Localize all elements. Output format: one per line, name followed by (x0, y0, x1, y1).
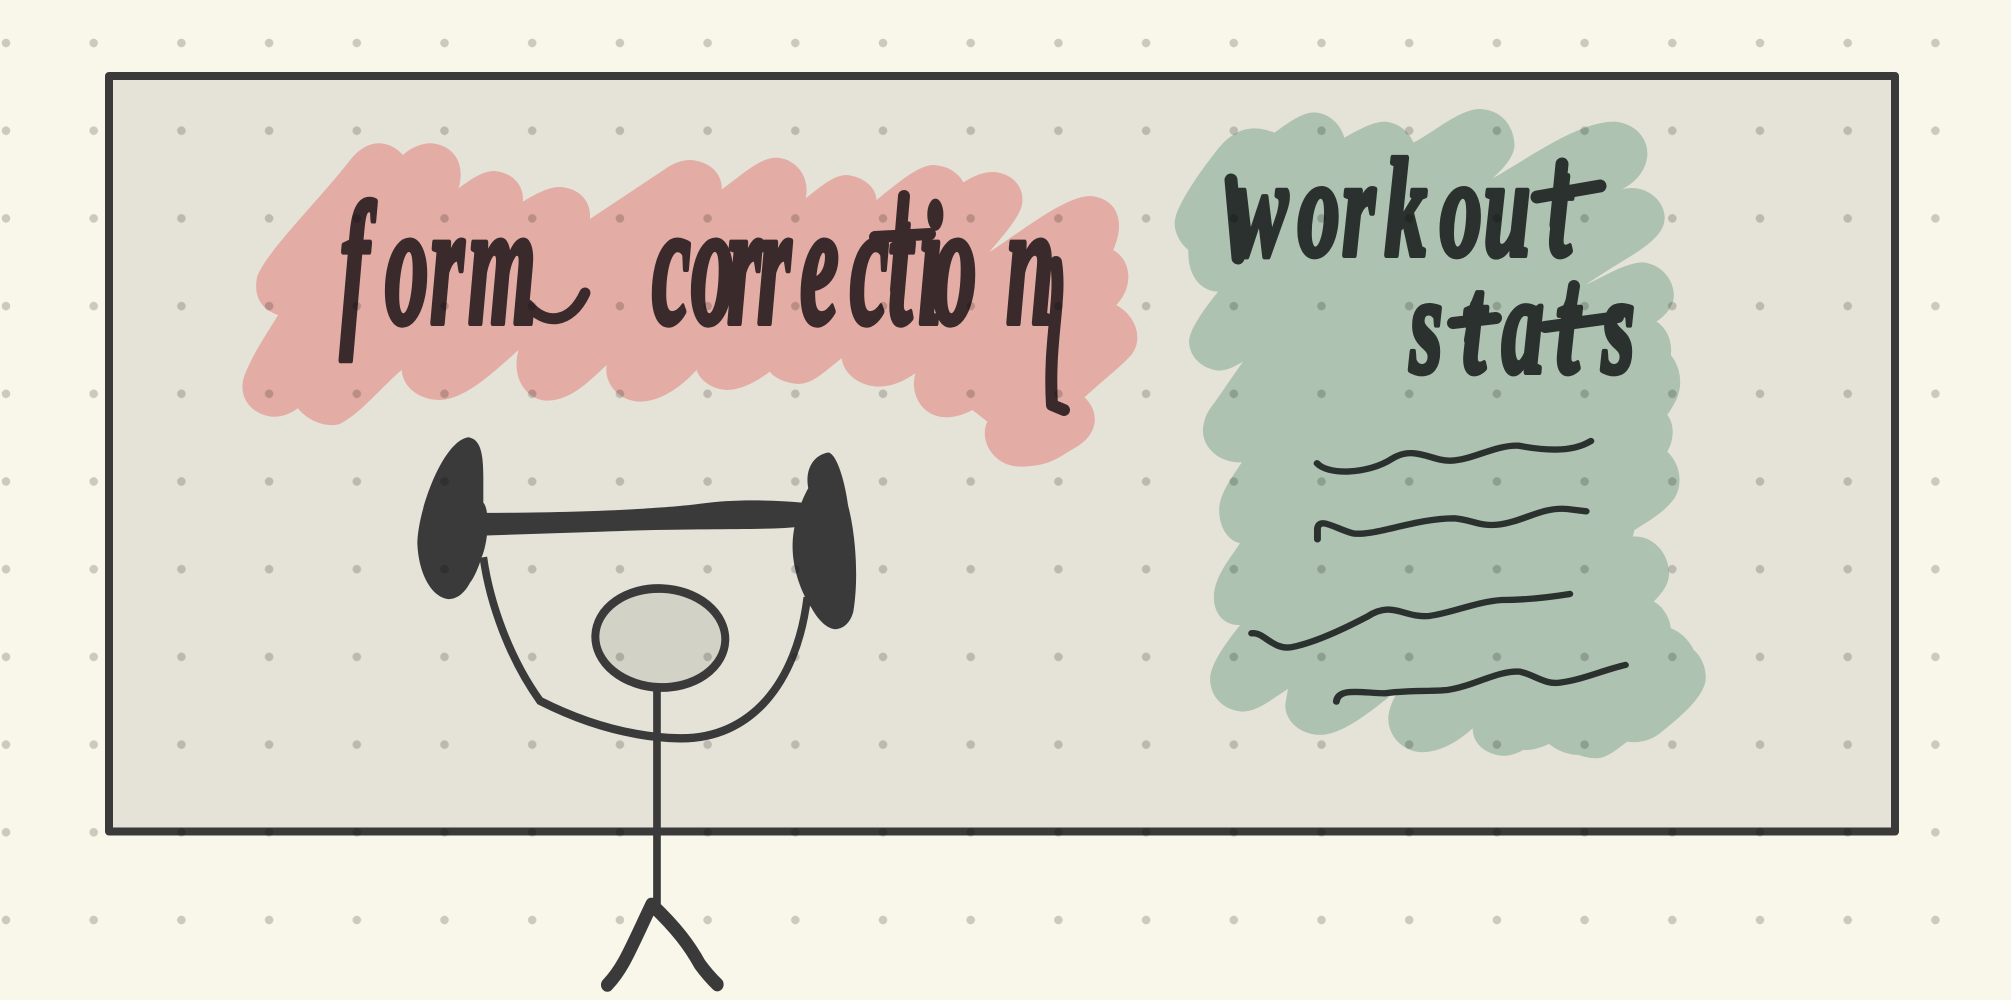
highlight: pink scribble behind form correction (242, 143, 1137, 467)
arms (483, 557, 807, 738)
head (594, 586, 727, 690)
heading: workout stats: stats (1409, 247, 1635, 402)
line 1 (1317, 441, 1591, 472)
line 2 (1317, 509, 1586, 539)
barbell bar (483, 500, 803, 535)
line 4 (1336, 665, 1625, 702)
stat lines: four wavy scribbled lines (1252, 441, 1625, 702)
barbell right weight (793, 453, 856, 629)
line 3 (1252, 594, 1570, 648)
figure: stick figure lifting a barbell (417, 437, 856, 985)
legs (607, 904, 717, 985)
body (645, 690, 668, 906)
swash: strokes on stats (1453, 286, 1618, 340)
swash: t stem and crossbar (875, 196, 930, 290)
barbell left weight (417, 437, 488, 599)
heading: workout stats: workout (1232, 130, 1573, 285)
swash: final letter tail (1051, 262, 1064, 410)
swash: strokes on workout (1231, 164, 1600, 258)
highlight: green scribble behind workout stats (1175, 109, 1706, 758)
panel: main frame (109, 76, 1895, 832)
heading: form correction: form correction (340, 167, 1055, 361)
swash: m exit stroke (528, 293, 585, 319)
heading: workout stats (1231, 130, 1635, 402)
